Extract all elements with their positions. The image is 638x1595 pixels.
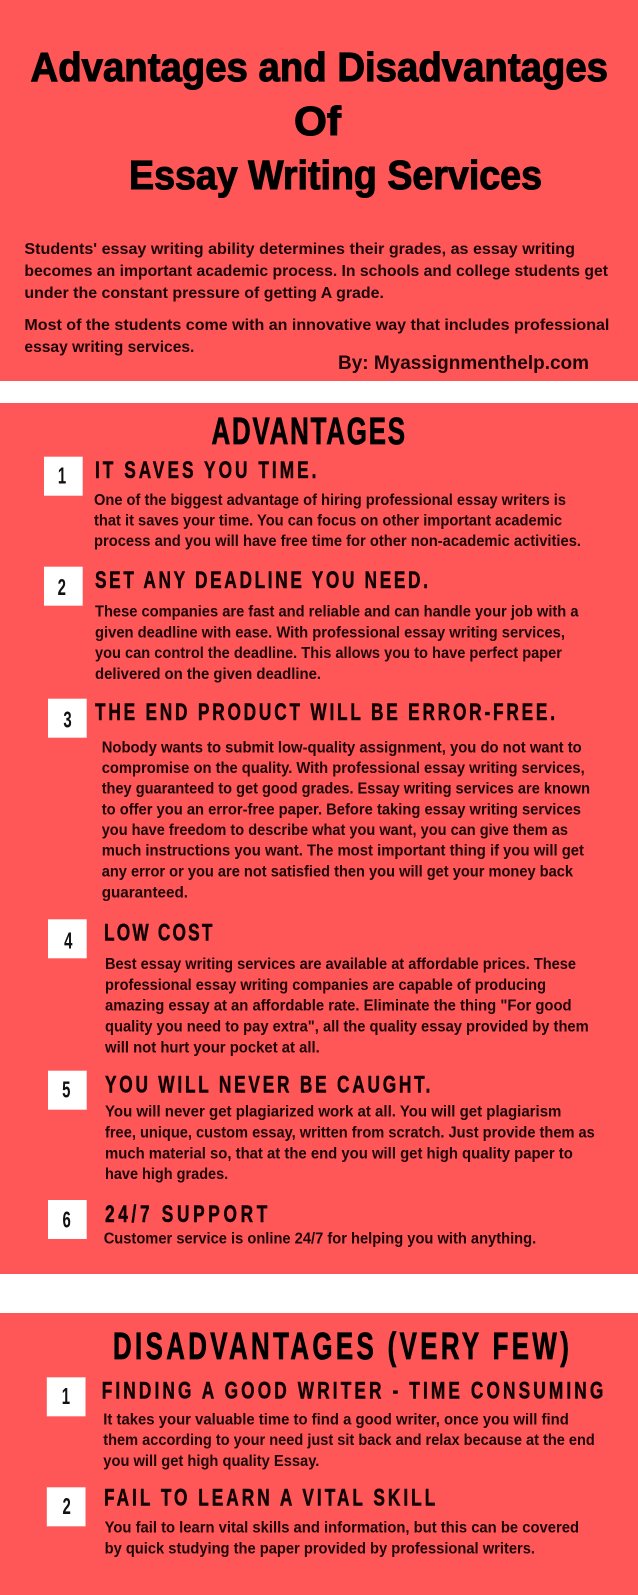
item body: you can control the deadline. This allows you to have perfect paper — [95, 645, 562, 662]
item heading: IT SAVES YOU TIME. — [95, 457, 316, 484]
item body: amazing essay at an affordable rate. Eliminate the thing "For good — [105, 998, 572, 1015]
item body: Nobody wants to submit low-quality assignment, you do not want to — [102, 740, 582, 756]
number badge 1: 1 — [58, 463, 66, 489]
panel: disadvantages — [0, 1313, 638, 1595]
item body: you have freedom to describe what you want, you can give them as — [102, 822, 568, 839]
item body: These companies are fast and reliable and can handle your job with a — [95, 604, 579, 621]
item body: free, unique, custom essay, written from scratch. Just provide them as — [105, 1124, 595, 1141]
item heading: 24/7 SUPPORT — [105, 1201, 267, 1228]
item body: much material so, that at the end you will get high quality paper to — [105, 1145, 573, 1162]
item heading: YOU WILL NEVER BE CAUGHT. — [105, 1072, 430, 1098]
title: Essay Writing Services — [129, 152, 542, 198]
disadvantage 1 — [47, 1377, 603, 1470]
item body — [94, 492, 581, 550]
number badge 6 — [48, 1200, 87, 1239]
intro text: Students' essay writing ability determines their grades, as essay writing — [24, 241, 575, 258]
advantage 3 — [48, 699, 590, 901]
item body: that it saves your time. You can focus on other important academic — [94, 512, 562, 530]
item heading: FINDING A GOOD WRITER - TIME CONSUMING — [102, 1378, 603, 1404]
item body: much instructions you want. The most important thing if you will get — [102, 843, 585, 860]
number badge 3 — [48, 699, 87, 738]
item body: given deadline with ease. With professional essay writing services, — [95, 624, 565, 641]
number badge 2 — [47, 1487, 86, 1526]
item body: It takes your valuable time to find a good writer, once you will find — [103, 1411, 569, 1428]
number badge 1 — [47, 1377, 86, 1416]
heading: disadvantages: DISADVANTAGES (VERY FEW) — [113, 1325, 569, 1367]
intro text: becomes an important academic process. In schools and college students get — [24, 263, 609, 280]
number badge 1: 1 — [62, 1384, 70, 1410]
number badge 4 — [48, 919, 87, 958]
title — [30, 44, 608, 198]
item body — [105, 1104, 595, 1183]
item body: them according to your need just sit back and relax because at the end — [103, 1432, 595, 1449]
number badge 5: 5 — [62, 1078, 71, 1104]
advantage 4 — [48, 919, 589, 1056]
item body: professional essay writing companies are capable of producing — [105, 977, 546, 994]
heading: advantages: ADVANTAGES — [212, 410, 405, 452]
item body — [95, 604, 579, 683]
item body: guaranteed. — [102, 884, 188, 901]
item body: Customer service is online 24/7 for helping you with anything. — [104, 1230, 536, 1247]
item body: by quick studying the paper provided by professional writers. — [105, 1540, 535, 1557]
item heading: THE END PRODUCT WILL BE ERROR-FREE. — [95, 699, 555, 726]
item body: Best essay writing services are available at affordable prices. These — [105, 956, 576, 973]
number badge 6: 6 — [63, 1208, 71, 1234]
number badge 4: 4 — [64, 928, 73, 954]
item body: any error or you are not satisfied then you will get your money back — [102, 864, 573, 881]
item body: quality you need to pay extra", all the quality essay provided by them — [105, 1018, 589, 1035]
item body: You fail to learn vital skills and information, but this can be covered — [105, 1520, 579, 1537]
number badge 2: 2 — [63, 1494, 71, 1520]
advantage 2 — [44, 567, 579, 683]
item body — [104, 956, 589, 1056]
number badge 5 — [48, 1071, 87, 1110]
panel: advantages — [0, 403, 638, 1274]
item heading: SET ANY DEADLINE YOU NEED. — [95, 567, 428, 594]
item body: will not hurt your pocket at all. — [104, 1039, 320, 1056]
number badge 1 — [44, 457, 83, 496]
item heading: LOW COST — [104, 920, 213, 946]
item body: you will get high quality Essay. — [103, 1453, 319, 1470]
item heading: FAIL TO LEARN A VITAL SKILL — [104, 1485, 435, 1511]
item body: they guaranteed to get good grades. Essay writing services are known — [102, 781, 590, 798]
panel: introduction — [0, 0, 638, 381]
title: Advantages and Disadvantages — [30, 44, 608, 90]
advantage 5 — [48, 1071, 595, 1183]
title: Of — [294, 98, 341, 144]
intro text: Most of the students come with an innovative way that includes professional — [24, 317, 609, 334]
advantage 6 — [48, 1200, 536, 1247]
byline: By: Myassignmenthelp.com — [338, 353, 589, 374]
intro text: under the constant pressure of getting A grade. — [24, 285, 384, 302]
intro text — [24, 241, 609, 356]
item body — [103, 1411, 595, 1470]
item body: process and you will have free time for other non-academic activities. — [94, 533, 581, 550]
number badge 2 — [44, 567, 83, 606]
item body: have high grades. — [105, 1166, 228, 1183]
item body — [102, 740, 590, 901]
disadvantage 2 — [47, 1485, 579, 1557]
item body — [105, 1520, 579, 1557]
number badge 3: 3 — [63, 708, 72, 734]
advantage 1 — [44, 457, 581, 550]
item body: One of the biggest advantage of hiring professional essay writers is — [94, 492, 566, 509]
item body: You will never get plagiarized work at all. You will get plagiarism — [105, 1104, 561, 1121]
number badge 2: 2 — [58, 575, 66, 601]
intro text: essay writing services. — [24, 339, 194, 356]
item body: delivered on the given deadline. — [95, 666, 321, 683]
item body: compromise on the quality. With professional essay writing services, — [102, 760, 585, 777]
item body: to offer you an error-free paper. Before taking essay writing services — [102, 801, 581, 818]
